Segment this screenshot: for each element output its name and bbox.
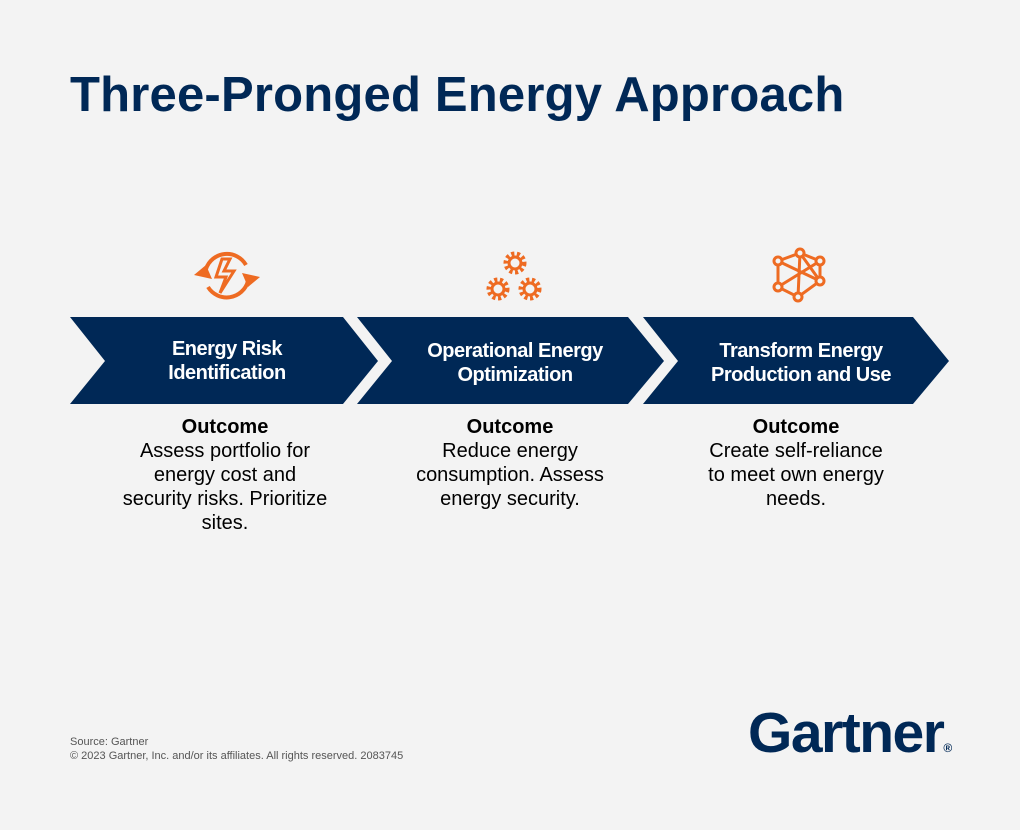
icon: energy cycle	[194, 252, 260, 300]
title: Three-Pronged Energy Approach	[70, 68, 844, 122]
outcome 3: needs.	[766, 488, 826, 510]
label 2: Optimization	[457, 364, 573, 386]
footer source: © 2023 Gartner, Inc. and/or its affiliates. All rights reserved. 2083745	[70, 750, 403, 762]
logo: Gartner®	[748, 701, 952, 765]
footer source	[70, 736, 403, 762]
label 3	[711, 340, 891, 386]
label 1: Identification	[168, 362, 286, 384]
outcome 3: to meet own energy	[708, 464, 884, 486]
label 3: Transform Energy	[719, 340, 883, 362]
outcome 3: Create self-reliance	[709, 440, 883, 462]
outcome 1: security risks. Prioritize	[123, 488, 327, 510]
label 3: Production and Use	[711, 364, 891, 386]
footer source: Source: Gartner	[70, 736, 148, 748]
chevrons	[70, 317, 949, 404]
icon: gears	[486, 252, 542, 300]
outcome 2: Reduce energy	[442, 440, 578, 462]
outcome 2: energy security.	[440, 488, 580, 510]
outcome 1: energy cost and	[154, 464, 296, 486]
outcome 1: sites.	[202, 512, 248, 534]
outcome 1	[123, 416, 327, 534]
label 1: Energy Risk	[172, 338, 282, 360]
outcome 1: Outcome	[182, 416, 268, 438]
icon: network	[772, 248, 826, 302]
label 1	[168, 338, 286, 384]
outcome 3	[708, 416, 884, 510]
label 2	[427, 340, 604, 386]
outcome 2: consumption. Assess	[416, 464, 604, 486]
outcome 2	[416, 416, 604, 510]
outcome 2: Outcome	[467, 416, 553, 438]
outcome 3: Outcome	[753, 416, 839, 438]
label 2: Operational Energy	[427, 340, 603, 362]
outcome 1: Assess portfolio for	[140, 440, 310, 462]
